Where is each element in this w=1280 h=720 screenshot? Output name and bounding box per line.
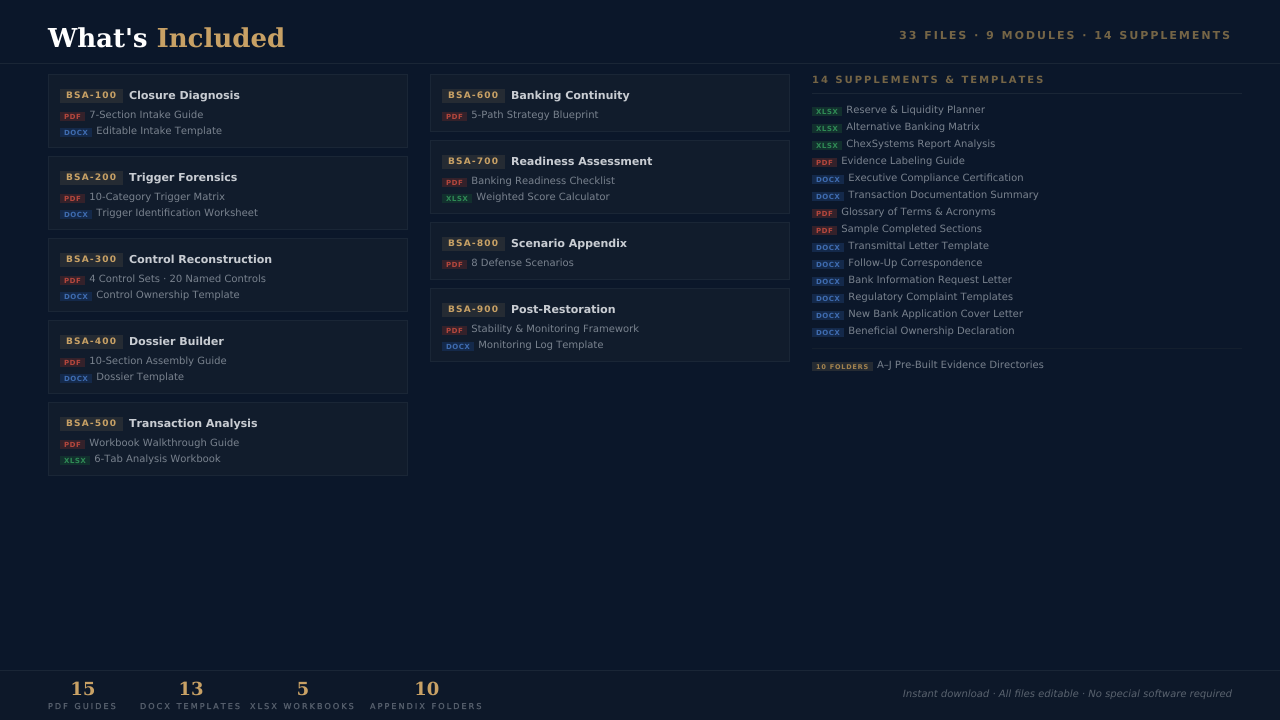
module card: BSA-600: BSA-600 bbox=[448, 91, 499, 101]
module card: BSA-500: PDF bbox=[64, 441, 81, 449]
module card: BSA-200 bbox=[48, 156, 408, 230]
module card: BSA-900: Monitoring Log Template bbox=[478, 340, 604, 351]
module card: BSA-500: XLSX bbox=[64, 457, 86, 465]
module card: BSA-100: Closure Diagnosis bbox=[129, 89, 240, 102]
module card: BSA-400 bbox=[48, 320, 408, 394]
supplements list bbox=[812, 105, 1039, 337]
module card: BSA-500: Transaction Analysis bbox=[129, 417, 258, 430]
supplements list: PDF bbox=[816, 210, 833, 218]
module card: BSA-500: Workbook Walkthrough Guide bbox=[89, 438, 239, 449]
title: What's Included bbox=[48, 24, 285, 54]
stat: DOCX templates bbox=[140, 679, 242, 711]
supplements list: PDF bbox=[816, 227, 833, 235]
module card: BSA-300: 4 Control Sets · 20 Named Controls bbox=[89, 274, 266, 285]
module card: BSA-400: Dossier Template bbox=[96, 372, 184, 383]
supplements list: DOCX bbox=[816, 176, 840, 184]
module card: BSA-900: BSA-900 bbox=[448, 305, 499, 315]
module card: BSA-100 bbox=[48, 74, 408, 148]
supplements list: Evidence Labeling Guide bbox=[841, 156, 965, 167]
module card: BSA-300: Control Ownership Template bbox=[96, 290, 240, 301]
module card: BSA-700 bbox=[430, 140, 790, 214]
supplements list: Alternative Banking Matrix bbox=[846, 122, 980, 133]
module card: BSA-700: XLSX bbox=[446, 195, 468, 203]
module card: BSA-700: Banking Readiness Checklist bbox=[471, 176, 615, 187]
supplements list: XLSX bbox=[816, 108, 838, 116]
module card: BSA-700: BSA-700 bbox=[448, 157, 499, 167]
module card: BSA-300: Control Reconstruction bbox=[129, 253, 272, 266]
module card: BSA-500 bbox=[48, 402, 408, 476]
module card: BSA-200: Trigger Forensics bbox=[129, 171, 237, 184]
panel: supplements and templates bbox=[812, 75, 1242, 371]
supplements list: Executive Compliance Certification bbox=[848, 173, 1024, 184]
delivery note: Instant download · All files editable · No special software required bbox=[903, 689, 1232, 700]
supplements list: DOCX bbox=[816, 329, 840, 337]
supplements list: Regulatory Complaint Templates bbox=[848, 292, 1013, 303]
module card: BSA-800 bbox=[430, 222, 790, 280]
supplements list: DOCX bbox=[816, 295, 840, 303]
supplements list: DOCX bbox=[816, 278, 840, 286]
module card: BSA-900: Stability & Monitoring Framework bbox=[471, 324, 639, 335]
supplements list: DOCX bbox=[816, 193, 840, 201]
module card: BSA-700: Readiness Assessment bbox=[511, 155, 652, 168]
appendix folders row: 10 FOLDERS bbox=[816, 363, 869, 371]
supplements list: DOCX bbox=[816, 261, 840, 269]
module card: BSA-600 bbox=[430, 74, 790, 132]
module card: BSA-500: BSA-500 bbox=[66, 419, 117, 429]
module card: BSA-900: Post-Restoration bbox=[511, 303, 616, 316]
module card: BSA-400: Dossier Builder bbox=[129, 335, 224, 348]
module card: BSA-800: PDF bbox=[446, 261, 463, 269]
stat: DOCX templates: 13 bbox=[179, 679, 204, 700]
stat: XLSX workbooks: XLSX WORKBOOKS bbox=[250, 702, 356, 711]
supplements list: Sample Completed Sections bbox=[841, 224, 982, 235]
stat: DOCX templates: DOCX TEMPLATES bbox=[140, 702, 242, 711]
module card: BSA-600: PDF bbox=[446, 113, 463, 121]
supplements heading: 14 SUPPLEMENTS & TEMPLATES bbox=[812, 75, 1045, 86]
stat: appendix folders: APPENDIX FOLDERS bbox=[370, 702, 484, 711]
module card: BSA-200: PDF bbox=[64, 195, 81, 203]
supplements list: Glossary of Terms & Acronyms bbox=[841, 207, 996, 218]
module card: BSA-600: Banking Continuity bbox=[511, 89, 630, 102]
module card: BSA-300: BSA-300 bbox=[66, 255, 117, 265]
supplements heading bbox=[812, 74, 1242, 94]
supplements list: XLSX bbox=[816, 125, 838, 133]
module card: BSA-100: Editable Intake Template bbox=[96, 126, 222, 137]
supplements list: ChexSystems Report Analysis bbox=[846, 139, 995, 150]
module card: BSA-400: BSA-400 bbox=[66, 337, 117, 347]
stat: XLSX workbooks bbox=[250, 679, 356, 711]
supplements list: Transmittal Letter Template bbox=[848, 241, 989, 252]
module card: BSA-700: PDF bbox=[446, 179, 463, 187]
supplements list: Reserve & Liquidity Planner bbox=[846, 105, 985, 116]
header bar bbox=[0, 0, 1280, 64]
appendix folders row: A–J Pre-Built Evidence Directories bbox=[877, 360, 1044, 371]
module card: BSA-900: PDF bbox=[446, 327, 463, 335]
module card: BSA-200: 10-Category Trigger Matrix bbox=[89, 192, 225, 203]
module card: BSA-200: BSA-200 bbox=[66, 173, 117, 183]
supplements list: PDF bbox=[816, 159, 833, 167]
supplements list: XLSX bbox=[816, 142, 838, 150]
module card: BSA-100: DOCX bbox=[64, 129, 88, 137]
module card: BSA-900: DOCX bbox=[446, 343, 470, 351]
module card: BSA-300: DOCX bbox=[64, 293, 88, 301]
module card: BSA-200: DOCX bbox=[64, 211, 88, 219]
module card: BSA-900 bbox=[430, 288, 790, 362]
stat: PDF guides bbox=[48, 679, 118, 711]
supplements list: DOCX bbox=[816, 244, 840, 252]
module card: BSA-800: 8 Defense Scenarios bbox=[471, 258, 574, 269]
stat: PDF guides: PDF GUIDES bbox=[48, 702, 118, 711]
footer bar bbox=[0, 670, 1280, 720]
supplements list: Bank Information Request Letter bbox=[848, 275, 1012, 286]
supplements list: New Bank Application Cover Letter bbox=[848, 309, 1023, 320]
supplements list: Beneficial Ownership Declaration bbox=[848, 326, 1015, 337]
file count summary: 33 FILES · 9 MODULES · 14 SUPPLEMENTS bbox=[899, 29, 1232, 42]
module card: BSA-400: PDF bbox=[64, 359, 81, 367]
supplements list: Follow-Up Correspondence bbox=[848, 258, 982, 269]
module card: BSA-400: 10-Section Assembly Guide bbox=[89, 356, 227, 367]
module card: BSA-800: BSA-800 bbox=[448, 239, 499, 249]
module card: BSA-500: 6-Tab Analysis Workbook bbox=[94, 454, 221, 465]
module card: BSA-100: BSA-100 bbox=[66, 91, 117, 101]
module card: BSA-100: PDF bbox=[64, 113, 81, 121]
supplements list: DOCX bbox=[816, 312, 840, 320]
stat: PDF guides: 15 bbox=[70, 679, 95, 700]
stat: appendix folders bbox=[370, 679, 484, 711]
module card: BSA-700: Weighted Score Calculator bbox=[476, 192, 610, 203]
stat: appendix folders: 10 bbox=[414, 679, 439, 700]
module card: BSA-600: 5-Path Strategy Blueprint bbox=[471, 110, 598, 121]
module card: BSA-300 bbox=[48, 238, 408, 312]
module card: BSA-400: DOCX bbox=[64, 375, 88, 383]
module card: BSA-200: Trigger Identification Worksheet bbox=[96, 208, 258, 219]
module card: BSA-300: PDF bbox=[64, 277, 81, 285]
supplements list: Transaction Documentation Summary bbox=[848, 190, 1039, 201]
module card: BSA-100: 7-Section Intake Guide bbox=[89, 110, 203, 121]
stat: XLSX workbooks: 5 bbox=[297, 679, 309, 700]
module card: BSA-800: Scenario Appendix bbox=[511, 237, 627, 250]
